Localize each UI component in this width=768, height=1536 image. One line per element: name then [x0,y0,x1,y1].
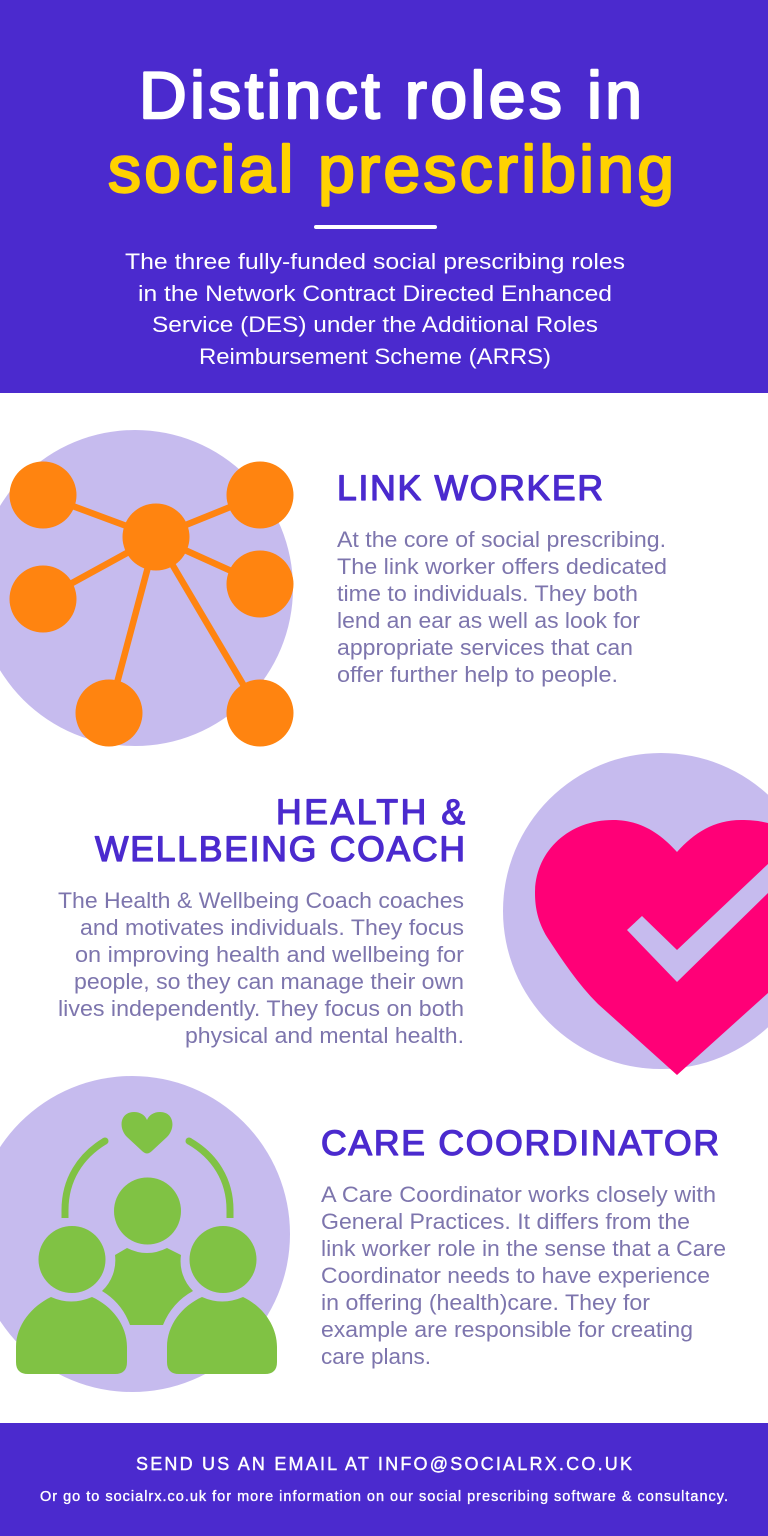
people [16,1178,277,1374]
title [108,58,674,206]
intro text [125,249,625,369]
link worker text: lend an ear as well as look for [337,608,641,633]
health and wellbeing coach heading: HEALTH & [276,792,465,832]
care coordinator heading: CARE COORDINATOR [321,1123,719,1163]
footer info line: Or go to socialrx.co.uk for more information on our social prescribing software & consultancy. [40,1489,728,1505]
icon: heart with check [503,753,768,1075]
intro text: Reimbursement Scheme (ARRS) [199,344,551,369]
link worker text: The link worker offers dedicated [337,554,667,579]
care coordinator text: General Practices. It differs from the [321,1209,690,1234]
link worker text [337,527,667,687]
title divider [314,225,437,229]
health and wellbeing coach heading [95,792,465,869]
health and wellbeing coach text: lives independently. They focus on both [58,996,464,1021]
health and wellbeing coach text [58,888,465,1048]
care coordinator text: care plans. [321,1344,431,1369]
icon: network [0,430,294,746]
care coordinator text: in offering (health)care. They for [321,1290,651,1315]
care coordinator text: example are responsible for creating [321,1317,693,1342]
health and wellbeing coach text: on improving health and wellbeing for [75,942,465,967]
care coordinator text [321,1182,726,1369]
care coordinator text: A Care Coordinator works closely with [321,1182,716,1207]
small heart [122,1112,172,1154]
intro text: Service (DES) under the Additional Roles [152,312,598,337]
link worker text: At the core of social prescribing. [337,527,666,552]
intro text: in the Network Contract Directed Enhanced [138,281,612,306]
footer panel [0,1423,768,1536]
health and wellbeing coach text: and motivates individuals. They focus [80,915,464,940]
title: Distinct roles in [139,58,642,132]
arcs [65,1141,230,1218]
intro text: The three fully-funded social prescribing roles [125,249,625,274]
health and wellbeing coach text: people, so they can manage their own [74,969,464,994]
footer email line: SEND US AN EMAIL AT INFO@SOCIALRX.CO.UK [136,1454,632,1474]
health and wellbeing coach text: physical and mental health. [185,1023,464,1048]
care coordinator text: Coordinator needs to have experience [321,1263,710,1288]
link worker heading: LINK WORKER [337,468,603,508]
health and wellbeing coach text: The Health & Wellbeing Coach coaches [58,888,464,913]
icon: care team [0,1076,290,1392]
header panel [0,0,768,393]
link worker text: offer further help to people. [337,662,618,687]
link worker text: appropriate services that can [337,635,633,660]
care coordinator text: link worker role in the sense that a Care [321,1236,726,1261]
link worker text: time to individuals. They both [337,581,638,606]
title: social prescribing [108,132,674,206]
health and wellbeing coach heading: WELLBEING COACH [95,829,465,869]
